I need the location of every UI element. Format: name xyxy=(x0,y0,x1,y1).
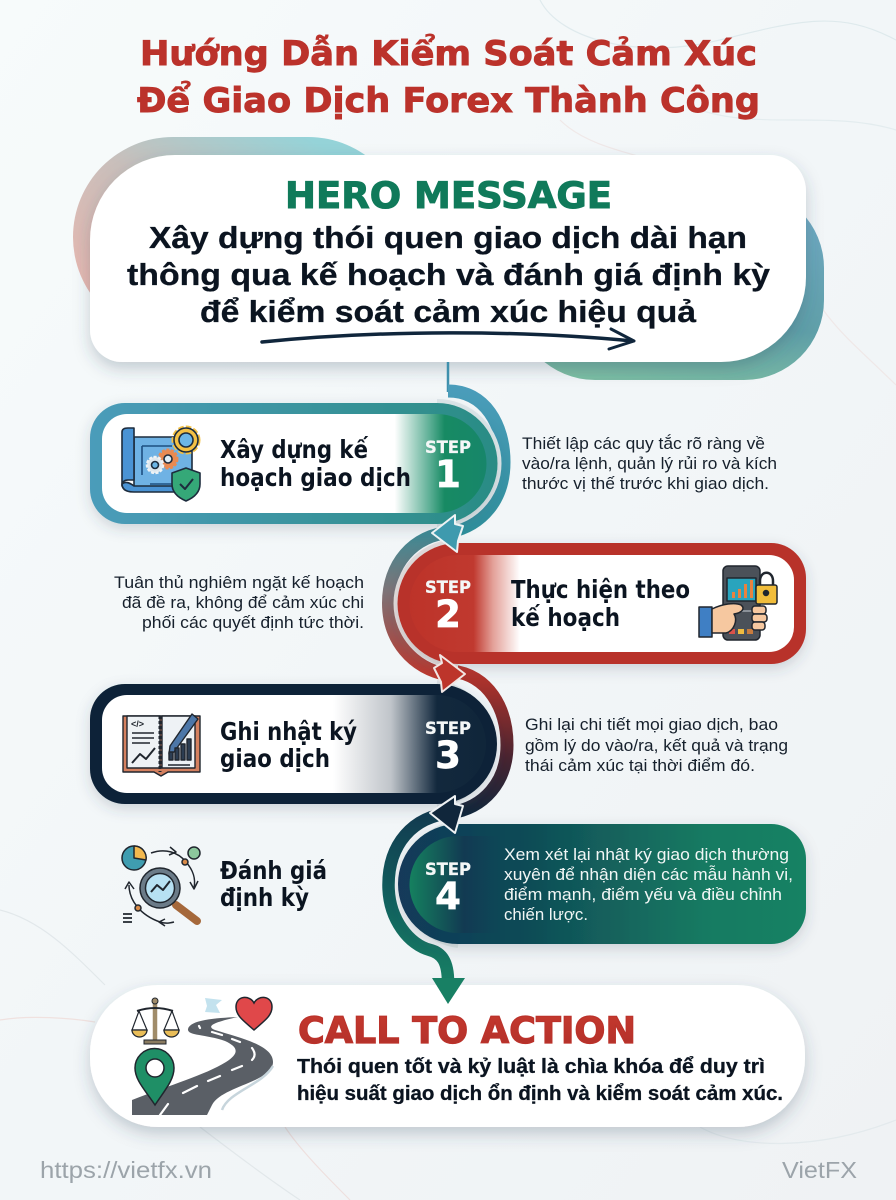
icon: periodic review magnifier xyxy=(122,846,200,926)
step 1 title: Xây dựng kế xyxy=(220,435,369,464)
arrow: band step 4 to call to action xyxy=(388,813,452,982)
step 1 title: hoạch giao dịch xyxy=(220,463,411,492)
arrow: band step 3 to step 4 xyxy=(450,671,507,813)
step 3 title: Ghi nhật ký xyxy=(220,717,357,746)
panel: step 2 xyxy=(396,541,806,666)
panel: step 4 xyxy=(398,822,806,946)
heading: hero message: HERO MESSAGE xyxy=(285,174,612,217)
step 1 description xyxy=(522,434,777,493)
step 4 title: Đánh giá xyxy=(220,856,327,885)
step 1 description: thước vị thế trước khi giao dịch. xyxy=(522,474,769,493)
arrow: band step 1 to step 2 xyxy=(448,391,504,532)
step 2 title: kế hoạch xyxy=(511,603,620,632)
call to action text: Thói quen tốt và kỷ luật là chìa khóa để duy trì xyxy=(297,1055,765,1078)
title xyxy=(137,33,760,121)
arrow: head step 1 to step 2 xyxy=(432,515,463,552)
step 2 description: Tuân thủ nghiêm ngặt kế hoạch xyxy=(114,573,364,592)
step 1 label xyxy=(425,438,471,496)
step 4 label: 4 xyxy=(435,875,461,918)
hero text: Xây dựng thói quen giao dịch dài hạn xyxy=(149,220,747,255)
panel: step 3 xyxy=(90,682,497,806)
step 3 label: STEP xyxy=(425,719,471,739)
step 2 label: STEP xyxy=(425,578,471,598)
arrow: head step 3 to step 4 xyxy=(430,796,463,833)
step 3 description: Ghi lại chi tiết mọi giao dịch, bao xyxy=(525,715,778,734)
step 4 title xyxy=(220,856,327,912)
step 4 title: định kỳ xyxy=(220,883,309,912)
call to action text xyxy=(297,1055,783,1105)
call to action text: hiệu suất giao dịch ổn định và kiểm soát cảm xúc. xyxy=(297,1082,783,1105)
step 1 description: vào/ra lệnh, quản lý rủi ro và kích xyxy=(522,454,777,473)
title: Để Giao Dịch Forex Thành Công xyxy=(137,80,760,121)
icon: scales, road, heart and location pin xyxy=(132,997,273,1115)
footer logo: VietFX xyxy=(782,1157,857,1183)
panel: step 1 xyxy=(90,401,500,526)
step 4 label: STEP xyxy=(425,860,471,880)
step 2 description: đã đề ra, không để cảm xúc chi xyxy=(122,593,364,612)
step 4 label xyxy=(425,860,471,918)
step 3 description: thái cảm xúc tại thời điểm đó. xyxy=(525,756,755,775)
hero text: để kiểm soát cảm xúc hiệu quả xyxy=(200,294,697,329)
step 2 label xyxy=(425,578,471,636)
connector: hero to step 1 xyxy=(447,362,449,392)
step 2 description: phối các quyết định tức thời. xyxy=(142,613,364,632)
step 3 description xyxy=(525,715,788,775)
hero text xyxy=(127,220,771,329)
step 1 description: Thiết lập các quy tắc rõ ràng về xyxy=(522,434,765,453)
step 3 label: 3 xyxy=(435,734,461,777)
arrow: band step 2 to step 3 xyxy=(388,532,452,675)
step 1 label: STEP xyxy=(425,438,471,458)
step 2 label: 2 xyxy=(435,593,461,636)
step 3 label xyxy=(425,719,471,777)
step 4 description: Xem xét lại nhật ký giao dịch thường xyxy=(504,845,789,864)
step 3 title: giao dịch xyxy=(220,744,330,773)
heading: call to action: CALL TO ACTION xyxy=(298,1009,636,1052)
title: Hướng Dẫn Kiểm Soát Cảm Xúc xyxy=(140,33,757,74)
step 4 description: điểm mạnh, điểm yếu và điều chỉnh xyxy=(504,885,782,904)
arrow: hero underline xyxy=(262,329,634,349)
arrow: head into call to action xyxy=(432,978,465,1004)
step 4 description xyxy=(504,845,793,924)
step 4 description: chiến lược. xyxy=(504,905,588,924)
icon: trading journal notebook xyxy=(123,714,200,776)
step 1 label: 1 xyxy=(435,453,461,496)
hero text: thông qua kế hoạch và đánh giá định kỳ xyxy=(127,257,771,292)
panel: call to action xyxy=(90,978,805,1127)
step 3 title xyxy=(220,717,357,773)
footer url: https://vietfx.vn xyxy=(40,1157,212,1183)
step 2 description xyxy=(114,573,364,632)
icon: trading journal notebook: </> xyxy=(131,719,144,729)
arrow: head step 2 to step 3 xyxy=(434,655,465,692)
step 2 title: Thực hiện theo xyxy=(511,575,690,604)
icon: blueprint with gears and shield xyxy=(122,428,200,501)
step 4 description: xuyên để nhận diện các mẫu hành vi, xyxy=(504,865,793,884)
step 1 title xyxy=(220,435,411,492)
panel: hero message xyxy=(73,137,824,380)
step 2 title xyxy=(511,575,690,632)
icon: hand holding phone with lock xyxy=(699,566,777,640)
step 3 description: gồm lý do vào/ra, kết quả và trạng xyxy=(525,736,788,755)
